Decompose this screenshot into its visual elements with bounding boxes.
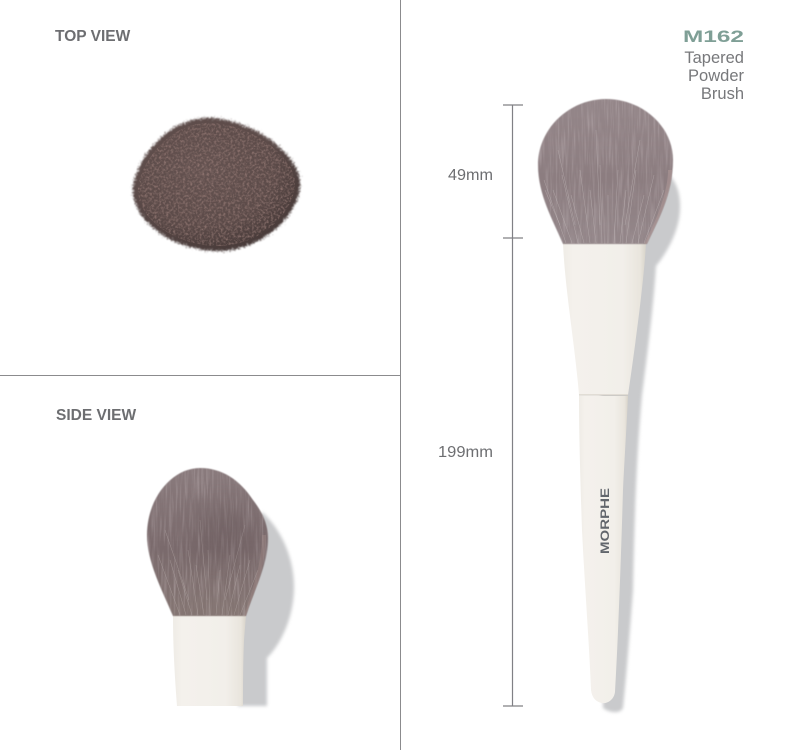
product name: Brush (701, 85, 744, 103)
bristles (538, 99, 673, 244)
measurement scale (503, 105, 523, 706)
panel divider: vertical (400, 0, 402, 750)
product title (683, 27, 744, 103)
heading: side view: SIDE VIEW (56, 407, 136, 424)
ferrule (563, 243, 646, 395)
full brush shadow (600, 170, 680, 712)
side view ferrule (173, 615, 246, 706)
product code: M162 (683, 27, 744, 46)
handle (579, 396, 628, 703)
product name: Tapered (684, 49, 744, 67)
icon: brush top view (133, 118, 300, 251)
label: 49mm: 49mm (448, 167, 493, 184)
heading: top view: TOP VIEW (55, 28, 131, 45)
ferrule seam (579, 394, 628, 396)
brand text: MORPHE (600, 488, 612, 554)
side view shadow (238, 512, 294, 706)
product name (684, 49, 744, 103)
product name: Powder (688, 67, 744, 85)
panel divider: horizontal (0, 374, 400, 376)
icon: full brush (538, 99, 680, 712)
side view bristles (147, 468, 268, 616)
label: 199mm: 199mm (438, 444, 493, 461)
icon: brush side view (147, 468, 294, 706)
